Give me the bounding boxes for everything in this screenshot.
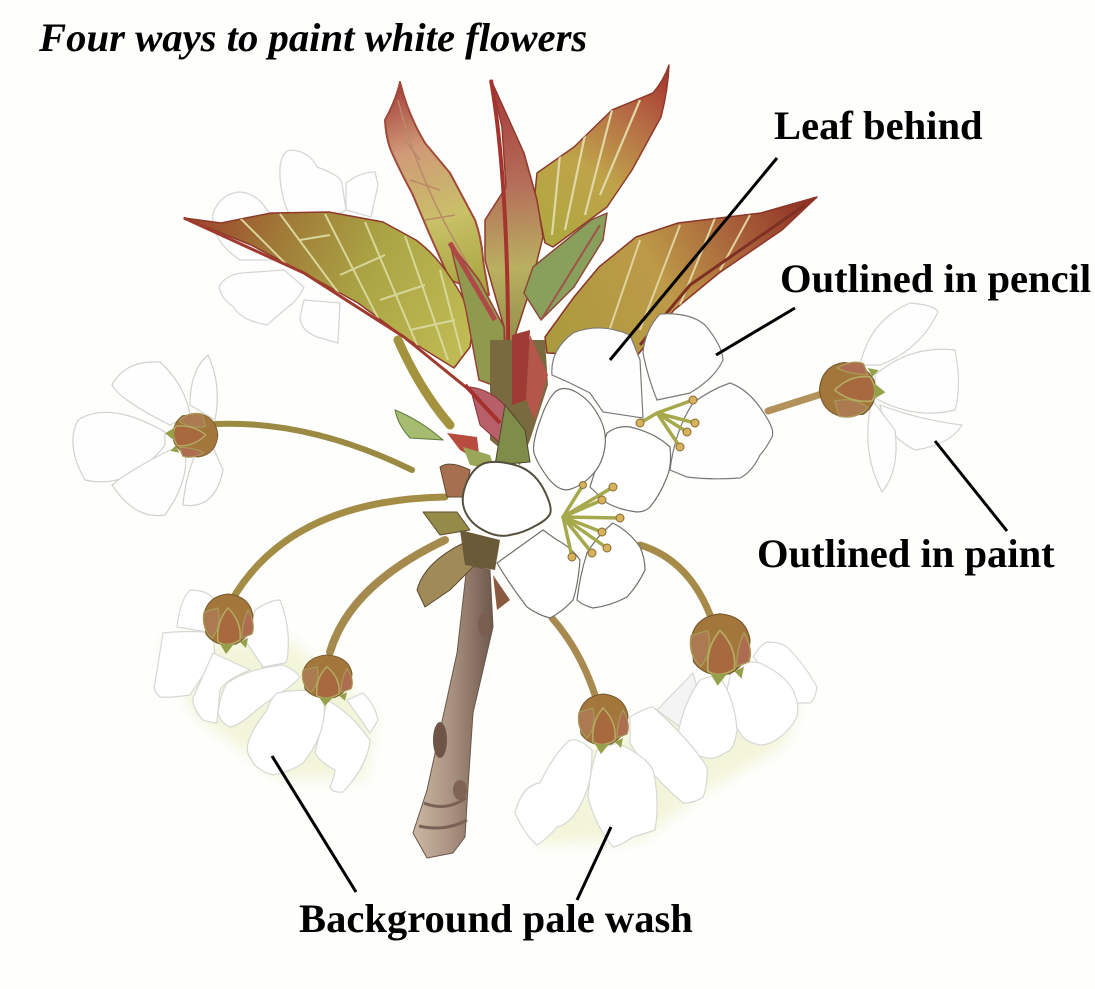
calyx: left flower bbox=[165, 413, 218, 457]
petals: left group bbox=[154, 590, 378, 792]
flower: outlined in paint bbox=[860, 303, 962, 492]
petals: right group bbox=[515, 642, 817, 847]
leaf: small green bbox=[524, 213, 607, 320]
flower: central front bbox=[463, 388, 671, 618]
branch bbox=[413, 565, 493, 858]
stamen tips bbox=[568, 396, 699, 561]
callout line: outlined in pencil bbox=[716, 308, 795, 355]
leaf: lower centre red-green bbox=[450, 243, 506, 390]
pale wash: left bbox=[160, 640, 375, 780]
label: outlined in paint: Outlined in paint bbox=[757, 531, 1055, 576]
calyx: lower centre bbox=[578, 694, 628, 754]
flowers: lower left with pale wash bbox=[154, 590, 378, 792]
callout line: outlined in paint bbox=[935, 441, 1007, 531]
leaf veins bbox=[240, 214, 462, 360]
title: Four ways to paint white flowers bbox=[38, 15, 587, 60]
leaf: right bbox=[545, 197, 817, 357]
callout line: wash right bbox=[577, 827, 611, 900]
flower: left bbox=[73, 355, 223, 516]
leaf: narrow upper left bbox=[385, 82, 489, 295]
flower: pale pencil behind leaves bbox=[213, 150, 378, 343]
calyx: lower right bbox=[690, 614, 750, 686]
leaf: upper right bbox=[535, 65, 669, 247]
stems bbox=[215, 340, 825, 695]
flowers: lower right with pale wash bbox=[515, 642, 817, 847]
stamens bbox=[563, 400, 695, 557]
central bud cluster bbox=[395, 330, 548, 610]
label: leaf behind: Leaf behind bbox=[774, 103, 983, 148]
flower: outlined in pencil bbox=[552, 314, 773, 479]
callout line: leaf behind bbox=[610, 158, 777, 360]
leaf: centre narrow bbox=[485, 80, 543, 400]
calyx: lower left 1 bbox=[203, 594, 253, 654]
calyx: lower left 2 bbox=[302, 655, 352, 706]
calyx: right flower bbox=[819, 362, 885, 417]
pale wash: right bbox=[525, 700, 800, 845]
leaf: large left bbox=[184, 212, 478, 397]
callout line: wash left bbox=[272, 756, 356, 892]
label: outlined in pencil: Outlined in pencil bbox=[780, 256, 1091, 301]
label: background pale wash: Background pale wash bbox=[299, 896, 693, 941]
